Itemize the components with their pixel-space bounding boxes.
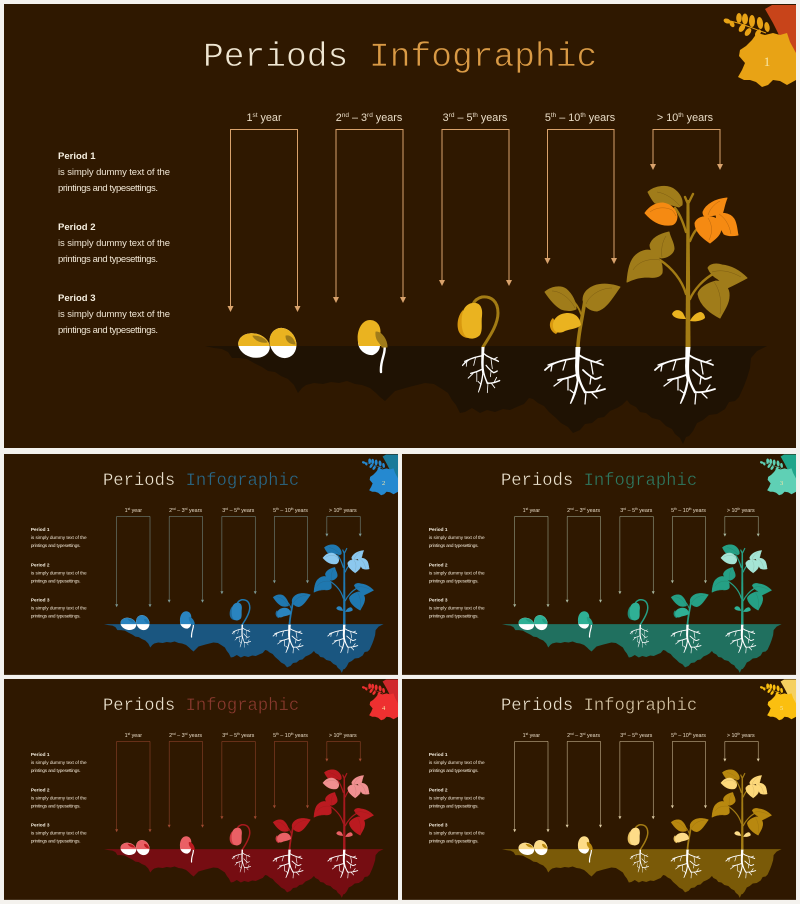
year labels: years bbox=[691, 733, 706, 739]
year labels: th bbox=[674, 507, 677, 511]
text block: periods: printings and typesettings. bbox=[429, 543, 479, 549]
text block: periods: Period 1 bbox=[429, 527, 448, 533]
text block: periods: is simply dummy text of the bbox=[31, 606, 87, 612]
year labels: year bbox=[258, 112, 282, 124]
text block: periods: is simply dummy text of the bbox=[429, 795, 485, 801]
year labels: years bbox=[684, 112, 714, 124]
year labels: – 5 bbox=[626, 733, 635, 739]
text block: periods: printings and typesettings. bbox=[429, 578, 479, 584]
text block: periods: is simply dummy text of the bbox=[31, 831, 87, 837]
icon: corner leaves with number bbox=[362, 679, 398, 720]
year labels: years bbox=[638, 508, 653, 514]
year labels: years bbox=[740, 508, 755, 514]
arrows: period brackets bbox=[115, 516, 362, 607]
year labels: th bbox=[551, 112, 557, 119]
text block: periods: Period 1 bbox=[58, 151, 96, 162]
year labels: 2 bbox=[567, 733, 570, 739]
year labels: > 10 bbox=[329, 508, 339, 514]
text block: periods: Period 3 bbox=[429, 598, 448, 604]
year labels: th bbox=[678, 112, 684, 119]
year labels: 5 bbox=[671, 733, 674, 739]
text block: periods: Period 2 bbox=[429, 787, 448, 793]
year labels: 3 bbox=[620, 733, 623, 739]
text block: periods: printings and typesettings. bbox=[58, 254, 158, 265]
arrows: over 10th years bracket bbox=[650, 130, 723, 170]
year labels: th bbox=[237, 732, 240, 736]
text block: periods: Period 1 bbox=[31, 752, 50, 758]
icon: young plant bbox=[545, 284, 620, 404]
year labels: rd bbox=[185, 507, 188, 511]
arrows: period brackets bbox=[513, 516, 760, 607]
year labels: 3 bbox=[222, 733, 225, 739]
year labels: th bbox=[472, 112, 478, 119]
panel: slide 4, red theme bbox=[4, 679, 398, 900]
text block: periods bbox=[429, 527, 485, 620]
year labels: rd bbox=[623, 507, 626, 511]
year labels: years bbox=[240, 508, 255, 514]
text block: periods: printings and typesettings. bbox=[31, 803, 81, 809]
text block: periods: Period 3 bbox=[31, 823, 50, 829]
year labels: rd bbox=[583, 507, 586, 511]
year labels: 3 bbox=[222, 508, 225, 514]
year labels: years bbox=[293, 733, 308, 739]
year labels: th bbox=[689, 732, 692, 736]
panel: main slide, orange theme bbox=[4, 4, 796, 448]
year labels: > 10 bbox=[727, 508, 737, 514]
year labels: years bbox=[342, 733, 357, 739]
year labels: 1 bbox=[125, 508, 128, 514]
icon: corner leaves with number: 4 bbox=[382, 705, 386, 712]
year labels: st bbox=[526, 507, 528, 511]
text block: periods: is simply dummy text of the bbox=[429, 570, 485, 576]
year labels: rd bbox=[225, 507, 228, 511]
year labels bbox=[125, 732, 357, 739]
arrows: 3rd to 5th years bracket bbox=[439, 130, 512, 286]
year labels: – 5 bbox=[228, 508, 237, 514]
text block: periods: is simply dummy text of the bbox=[429, 606, 485, 612]
text block: periods: Period 2 bbox=[31, 787, 50, 793]
icon: corner leaves with number bbox=[362, 454, 398, 495]
text block: periods: printings and typesettings. bbox=[58, 325, 158, 336]
year labels: nd bbox=[570, 507, 574, 511]
arrows: 2nd to 3rd years bracket bbox=[333, 130, 406, 303]
text block: periods: printings and typesettings. bbox=[58, 183, 158, 194]
panel: slide 3, green theme bbox=[402, 454, 796, 675]
year labels: years bbox=[187, 508, 202, 514]
year labels: rd bbox=[225, 732, 228, 736]
year labels bbox=[246, 112, 714, 124]
text block: periods: Period 2 bbox=[58, 222, 96, 233]
title: Periods Infographic bbox=[103, 697, 299, 716]
icon: corner leaves with number bbox=[760, 679, 796, 720]
year labels: th bbox=[276, 732, 279, 736]
year labels: year bbox=[130, 508, 142, 514]
year labels: years bbox=[373, 112, 403, 124]
year labels: 5 bbox=[273, 733, 276, 739]
text block: periods: Period 1 bbox=[429, 752, 448, 758]
year labels: – 10 bbox=[677, 733, 689, 739]
year labels: 5 bbox=[671, 508, 674, 514]
year labels: – 3 bbox=[176, 508, 185, 514]
panel: slide 5, gold theme bbox=[402, 679, 796, 900]
year labels: rd bbox=[185, 732, 188, 736]
year labels: nd bbox=[172, 732, 176, 736]
year labels: – 10 bbox=[279, 508, 291, 514]
icon: two seeds bbox=[235, 323, 301, 363]
year labels: 2 bbox=[169, 733, 172, 739]
text block: periods bbox=[31, 527, 87, 620]
year labels: 1 bbox=[246, 112, 252, 124]
text block: periods: Period 3 bbox=[31, 598, 50, 604]
text block: periods: printings and typesettings. bbox=[429, 614, 479, 620]
arrows: period brackets bbox=[115, 741, 362, 832]
plant growth stages bbox=[517, 545, 772, 653]
year labels: > 10 bbox=[329, 733, 339, 739]
year labels bbox=[523, 732, 755, 739]
year labels: nd bbox=[342, 112, 349, 119]
icon: sprouting seed bbox=[358, 320, 387, 372]
year labels: years bbox=[293, 508, 308, 514]
icon: mature plant bbox=[627, 186, 747, 404]
title: Periods Infographic bbox=[501, 472, 697, 491]
text block: periods: printings and typesettings. bbox=[429, 768, 479, 774]
year labels: years bbox=[585, 508, 600, 514]
year labels: years bbox=[740, 733, 755, 739]
year labels: 2 bbox=[336, 112, 342, 124]
year labels: years bbox=[691, 508, 706, 514]
year labels: – 10 bbox=[677, 508, 689, 514]
year labels: nd bbox=[172, 507, 176, 511]
year labels: year bbox=[528, 508, 540, 514]
year labels: 5 bbox=[273, 508, 276, 514]
year labels: th bbox=[635, 507, 638, 511]
text block: periods: is simply dummy text of the bbox=[58, 309, 170, 320]
text block: periods: is simply dummy text of the bbox=[429, 831, 485, 837]
year labels: st bbox=[526, 732, 528, 736]
text block: periods: is simply dummy text of the bbox=[31, 760, 87, 766]
year labels: > 10 bbox=[727, 733, 737, 739]
plant growth stages bbox=[517, 770, 772, 878]
plant growth stages bbox=[119, 770, 374, 878]
year labels bbox=[523, 507, 755, 514]
year labels bbox=[125, 507, 357, 514]
year labels: st bbox=[128, 732, 130, 736]
year labels: 1 bbox=[523, 508, 526, 514]
soil bbox=[205, 346, 767, 444]
text block: periods: printings and typesettings. bbox=[31, 839, 81, 845]
arrows: period brackets bbox=[513, 741, 760, 832]
arrows: 1st year bracket bbox=[228, 130, 300, 312]
year labels: – 3 bbox=[574, 733, 583, 739]
text block: periods: is simply dummy text of the bbox=[429, 760, 485, 766]
title: Periods Infographic bbox=[203, 38, 597, 77]
year labels: th bbox=[291, 507, 294, 511]
title: Periods Infographic bbox=[103, 472, 299, 491]
year labels: year bbox=[130, 733, 142, 739]
year labels: – 3 bbox=[574, 508, 583, 514]
year labels: rd bbox=[367, 112, 373, 119]
year labels: years bbox=[638, 733, 653, 739]
year labels: years bbox=[586, 112, 616, 124]
year labels: st bbox=[128, 507, 130, 511]
year labels: st bbox=[252, 112, 258, 119]
year labels: th bbox=[339, 507, 342, 511]
year labels: th bbox=[737, 732, 740, 736]
text block: periods: Period 1 bbox=[31, 527, 50, 533]
soil bbox=[104, 624, 384, 673]
year labels: 5 bbox=[545, 112, 551, 124]
icon: corner autumn leaves with number bbox=[723, 5, 796, 87]
soil bbox=[104, 849, 384, 898]
year labels: th bbox=[635, 732, 638, 736]
text block: periods bbox=[58, 151, 170, 336]
year labels: – 3 bbox=[349, 112, 367, 124]
year labels: rd bbox=[623, 732, 626, 736]
year labels: years bbox=[342, 508, 357, 514]
year labels: th bbox=[580, 112, 586, 119]
year labels: 1 bbox=[523, 733, 526, 739]
icon: corner autumn leaves with number: 1 bbox=[764, 54, 770, 69]
year labels: rd bbox=[449, 112, 455, 119]
year labels: th bbox=[237, 507, 240, 511]
year labels: rd bbox=[583, 732, 586, 736]
year labels: 2 bbox=[567, 508, 570, 514]
text block: periods: is simply dummy text of the bbox=[31, 570, 87, 576]
icon: corner leaves with number bbox=[760, 454, 796, 495]
soil bbox=[502, 849, 782, 898]
icon: corner leaves with number: 2 bbox=[382, 480, 385, 487]
text block: periods: Period 3 bbox=[429, 823, 448, 829]
year labels: th bbox=[737, 507, 740, 511]
text block: periods: printings and typesettings. bbox=[429, 803, 479, 809]
year labels: th bbox=[291, 732, 294, 736]
text block: periods: printings and typesettings. bbox=[429, 839, 479, 845]
text block: periods: is simply dummy text of the bbox=[58, 167, 170, 178]
text block: periods: is simply dummy text of the bbox=[58, 238, 170, 249]
text block: periods: printings and typesettings. bbox=[31, 578, 81, 584]
year labels: 1 bbox=[125, 733, 128, 739]
icon: corner leaves with number: 3 bbox=[780, 480, 783, 487]
text block: periods: printings and typesettings. bbox=[31, 543, 81, 549]
year labels: – 5 bbox=[626, 508, 635, 514]
icon: corner leaves with number: 5 bbox=[780, 705, 783, 712]
year labels: years bbox=[585, 733, 600, 739]
text block: periods: Period 2 bbox=[31, 562, 50, 568]
year labels: th bbox=[689, 507, 692, 511]
text block: periods: printings and typesettings. bbox=[31, 614, 81, 620]
icon: seedling with roots bbox=[458, 297, 500, 393]
year labels: – 5 bbox=[454, 112, 472, 124]
text block: periods bbox=[31, 752, 87, 845]
year labels: 3 bbox=[620, 508, 623, 514]
year labels: – 3 bbox=[176, 733, 185, 739]
year labels: 2 bbox=[169, 508, 172, 514]
year labels: nd bbox=[570, 732, 574, 736]
year labels: year bbox=[528, 733, 540, 739]
year labels: th bbox=[276, 507, 279, 511]
year labels: years bbox=[187, 733, 202, 739]
year labels: th bbox=[674, 732, 677, 736]
text block: periods: is simply dummy text of the bbox=[31, 795, 87, 801]
year labels: 3 bbox=[443, 112, 449, 124]
title: Periods Infographic bbox=[501, 697, 697, 716]
arrows: 5th to 10th years bracket bbox=[544, 130, 617, 264]
panel: slide 2, blue theme bbox=[4, 454, 398, 675]
year labels: – 10 bbox=[279, 733, 291, 739]
text block: periods: is simply dummy text of the bbox=[429, 535, 485, 541]
text block: periods: is simply dummy text of the bbox=[31, 535, 87, 541]
year labels: years bbox=[478, 112, 508, 124]
plant growth stages bbox=[119, 545, 374, 653]
year labels: years bbox=[240, 733, 255, 739]
soil bbox=[502, 624, 782, 673]
text block: periods bbox=[429, 752, 485, 845]
year labels: – 10 bbox=[556, 112, 580, 124]
year labels: th bbox=[339, 732, 342, 736]
text block: periods: printings and typesettings. bbox=[31, 768, 81, 774]
year labels: – 5 bbox=[228, 733, 237, 739]
year labels: > 10 bbox=[657, 112, 678, 124]
text block: periods: Period 2 bbox=[429, 562, 448, 568]
text block: periods: Period 3 bbox=[58, 293, 96, 304]
